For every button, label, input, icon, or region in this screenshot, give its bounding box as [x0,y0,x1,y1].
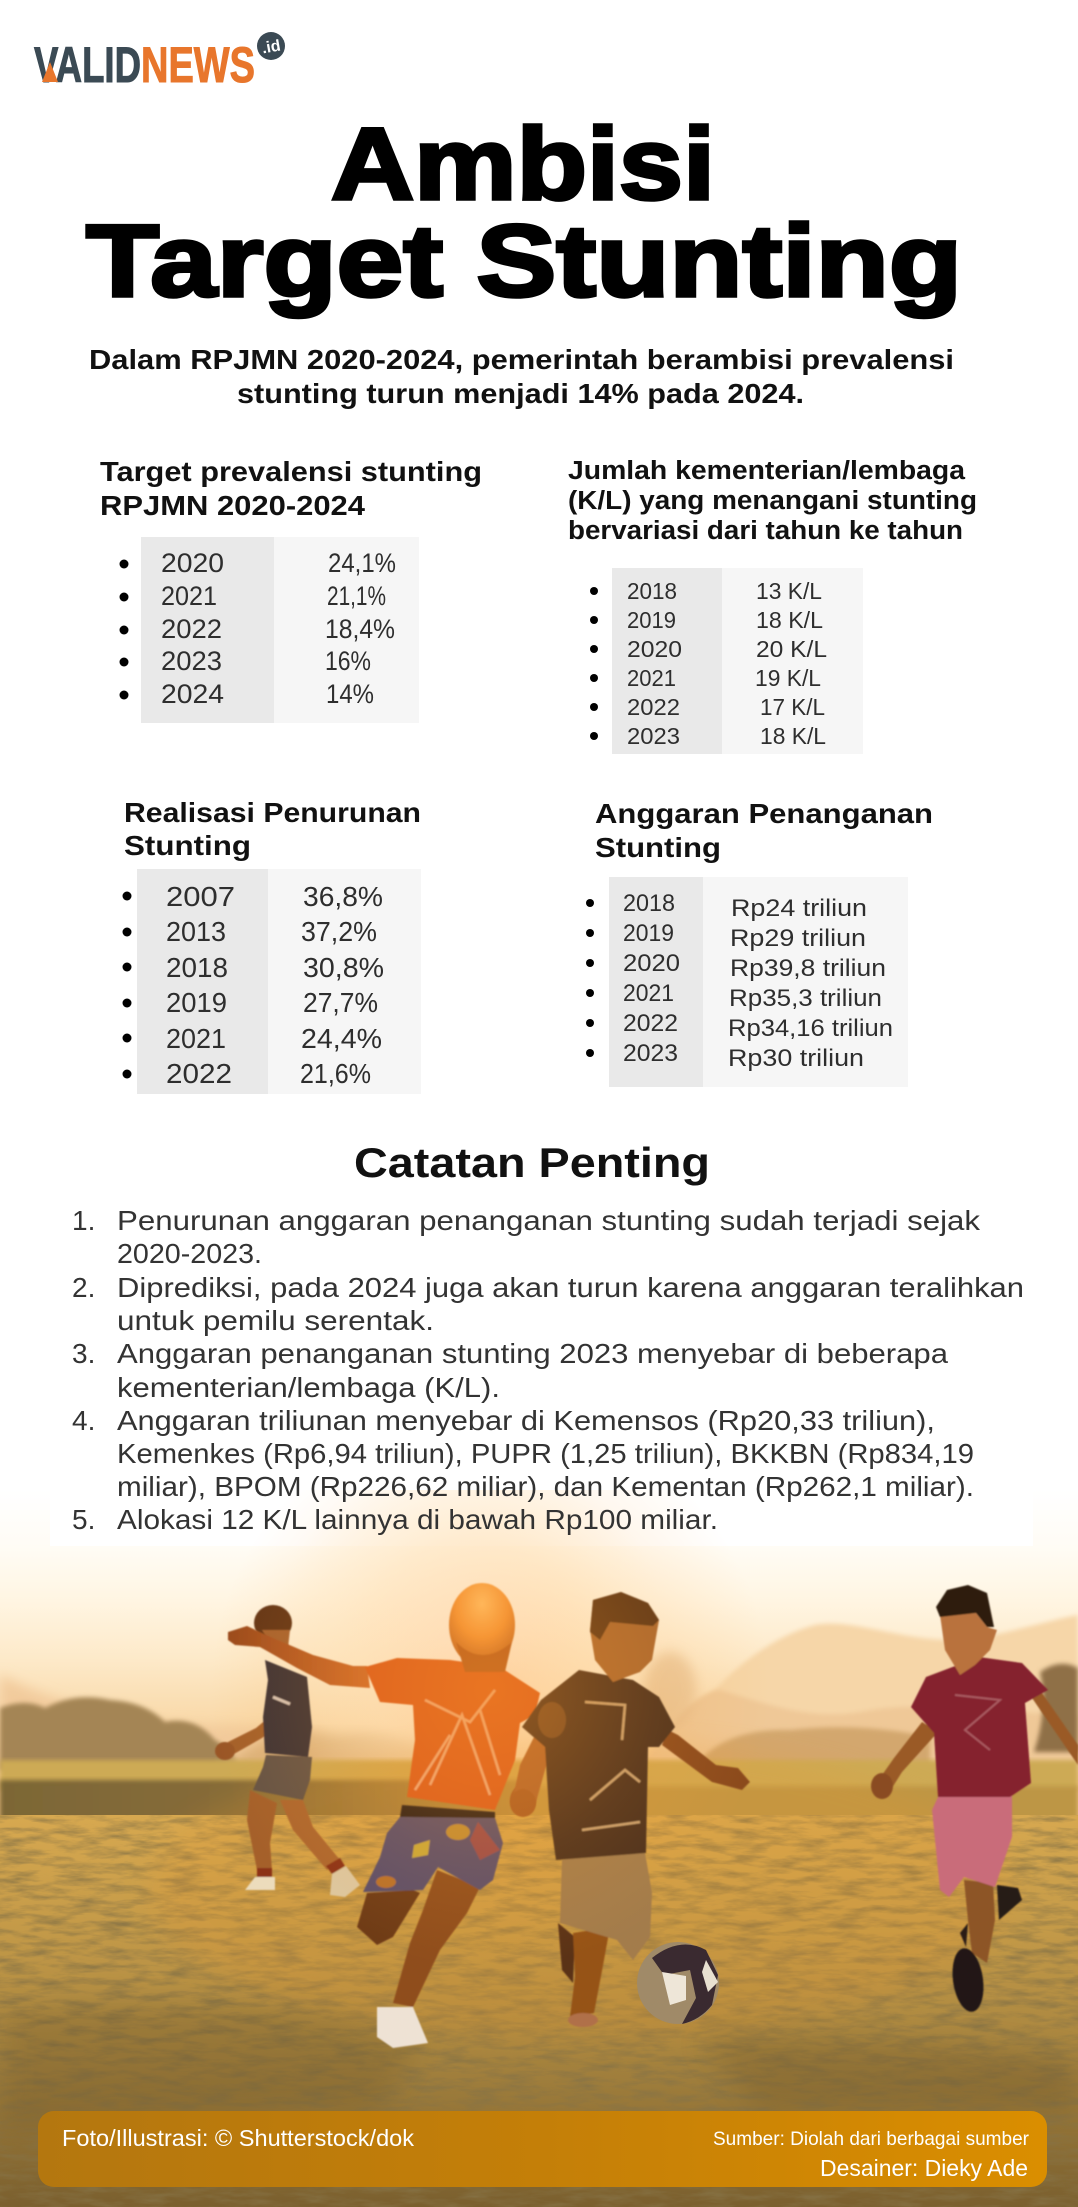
table: 18 K/L [760,723,826,749]
panel: anggaran penanganan [586,798,933,1087]
table: 2020 [627,636,682,662]
shoe [949,1946,987,2014]
table: 2019 [627,607,676,633]
table: 2018 [623,890,675,917]
notes list: Alokasi 12 K/L lainnya di bawah Rp100 miliar. [117,1504,718,1535]
warm light overlay [210,1490,770,1970]
heading: bervariasi dari tahun ke tahun [568,517,963,545]
notes list: 1. [72,1205,95,1236]
panel: jumlah K/L [568,457,977,754]
logo word VALID: VALID [34,37,141,93]
heading: Realisasi Penurunan [124,797,421,828]
warm glow on the field [150,1740,1010,2040]
table: 2023 [161,646,222,676]
table: 2018 [627,578,677,604]
table: 2023 [627,723,680,749]
bent leg [357,1890,420,1945]
logo: Validnews.id [34,32,285,93]
back child socks and shoes [257,1868,272,1877]
shirt print [582,1702,640,1830]
sky [0,1490,1078,1820]
notes list: Anggaran penanganan stunting 2023 menyebar di beberapa [117,1338,948,1369]
maroon shirt [911,1657,1048,1797]
back child shorts [253,1755,312,1800]
footer bar [38,2111,1047,2187]
back child sleeve stripe [273,1697,290,1704]
designer: Desainer: Dieky Ade [820,2155,1028,2181]
table: 17 K/L [760,694,825,720]
table [120,537,419,723]
table: 18 K/L [756,607,823,633]
right child [871,1585,1078,2014]
table [586,877,908,1087]
table: 2024 [161,679,224,709]
title [86,107,962,318]
orange shirt [365,1658,540,1810]
notes list: Anggaran triliunan menyebar di Kemensos (Rp20,33 triliun), [117,1405,935,1436]
hair [936,1585,994,1627]
heading: Anggaran Penanganan [595,798,933,829]
sunlight behind the main child [270,1490,670,1830]
back leg and shoe [997,1885,1022,1920]
table: 2021 [161,581,217,611]
heading [568,457,977,545]
heading: Stunting [595,832,721,863]
notes list: 2020-2023. [117,1238,262,1269]
field texture [0,1815,1078,2207]
tree line left [0,1697,240,1770]
table: Rp30 triliun [728,1045,864,1072]
table: 14% [326,679,374,709]
arms [512,1735,552,1802]
table: 21,6% [300,1058,371,1089]
back child [215,1605,360,1897]
logo word NEWS: NEWS [141,37,255,93]
heading: Stunting [124,830,251,861]
table: 30,8% [303,952,384,983]
waistband [400,1805,495,1820]
logo wedge [42,62,58,82]
table: 2020 [161,548,224,578]
outstretched arm [228,1626,370,1688]
title: Ambisi [331,107,715,221]
table: Rp39,8 triliun [730,955,886,982]
table [590,568,863,754]
notes list [72,1205,1024,1535]
standing leg [570,1927,610,2017]
table: 20 K/L [756,636,827,662]
heading: (K/L) yang menangani stunting [568,487,977,515]
back child head [254,1605,292,1641]
hand [510,1785,536,1815]
table [122,869,421,1094]
face [940,1613,997,1675]
dark bank of vegetation [0,1780,520,1820]
source: Sumber: Diolah dari berbagai sumber [713,2128,1029,2150]
shirt print [955,1695,1000,1750]
notes list: Kemenkes (Rp6,94 triliun), PUPR (1,25 triliun), BKKBN (Rp834,19 [117,1438,974,1469]
arms [880,1722,938,1788]
heading: Catatan Penting: Catatan Penting [354,1139,710,1186]
table: 2021 [627,665,676,691]
logo: Validnews.id: .id [261,37,282,57]
table: 2023 [623,1040,678,1067]
notes list: untuk pemilu serentak. [117,1305,434,1336]
distant hills [660,1615,1078,1770]
notes list: kementerian/lembaga (K/L). [117,1372,500,1403]
table: 13 K/L [756,578,822,604]
table: 36,8% [303,881,383,912]
heading [595,798,933,863]
main child in orange shirt [228,1583,540,2048]
notes list: 4. [72,1405,95,1436]
notes list: 3. [72,1338,95,1369]
back child shirt [263,1660,312,1757]
middle child [510,1592,750,2027]
title: Target Stunting [86,204,962,318]
heading [124,797,421,861]
shorts [560,1847,652,1960]
table: 2013 [166,916,226,947]
notes list: Penurunan anggaran penanganan stunting sudah terjadi sejak [117,1205,981,1236]
back child far arm [228,1708,292,1754]
shirt sunlit mottling [538,1702,566,1738]
head [449,1583,515,1667]
table: 27,7% [303,987,378,1018]
grass field [0,1815,1078,2207]
shirt [522,1670,675,1860]
table: 2021 [166,1023,226,1054]
table: 24,4% [301,1023,382,1054]
pink shorts [932,1790,1012,1897]
table: Rp29 triliun [730,925,866,952]
notes list: miliar), BPOM (Rp226,62 miliar), dan Kementan (Rp262,1 miliar). [117,1471,974,1502]
foot [568,2013,598,2027]
table: 2019 [623,920,674,947]
back foot [558,1923,575,1983]
hair [590,1592,659,1640]
table: Rp24 triliun [731,895,867,922]
panel: realisasi penurunan [122,797,421,1094]
table: Rp34,16 triliun [728,1015,893,1042]
white panel fading into the sky [50,1490,1033,1546]
table: 2022 [623,1010,678,1037]
notes list: Diprediksi, pada 2024 juga akan turun karena anggaran teralihkan [117,1272,1024,1303]
table: 2021 [623,980,674,1007]
faint tree behind middle child [644,1652,696,1728]
table: 37,2% [301,916,377,947]
shirt print [415,1690,500,1795]
standing leg [393,1870,480,2007]
table: 24,1% [328,548,396,578]
table: 2019 [166,987,227,1018]
subtitle [89,344,954,409]
patterned shorts [363,1817,503,1892]
table: 19 K/L [755,665,821,691]
subtitle: stunting turun menjadi 14% pada 2024. [237,378,804,409]
panel: target prevalensi [100,456,482,723]
table: 2007 [166,881,235,912]
table: 2018 [166,952,228,983]
table: 21,1% [327,581,386,611]
bright grass strip [0,1760,1078,1790]
heading: RPJMN 2020-2024 [100,490,365,521]
table: Rp35,3 triliun [729,985,882,1012]
football [637,1942,719,2024]
table: 16% [325,646,371,676]
table: 2022 [161,614,222,644]
white shoe [377,2007,428,2048]
table: 2022 [627,694,680,720]
standing leg [964,1880,995,1963]
notes list: 5. [72,1504,95,1535]
notes list: 2. [72,1272,95,1303]
photo: children playing football at sunset [0,1490,1078,2207]
photo credit: Foto/Illustrasi: © Shutterstock/dok [62,2125,414,2151]
heading: Target prevalensi stunting [100,456,482,487]
face [590,1592,659,1682]
subtitle: Dalam RPJMN 2020-2024, pemerintah berambisi prevalensi [89,344,954,375]
tree behind right child [1034,1664,1078,1752]
shadow bands on the field [0,2004,420,2130]
heading [100,456,482,521]
table: 18,4% [325,614,395,644]
heading: Jumlah kementerian/lembaga [568,457,966,485]
back child legs [247,1790,277,1870]
table: 2020 [623,950,680,977]
table: 2022 [166,1058,232,1089]
tree line right [690,1727,930,1774]
logo badge .id [257,32,285,60]
